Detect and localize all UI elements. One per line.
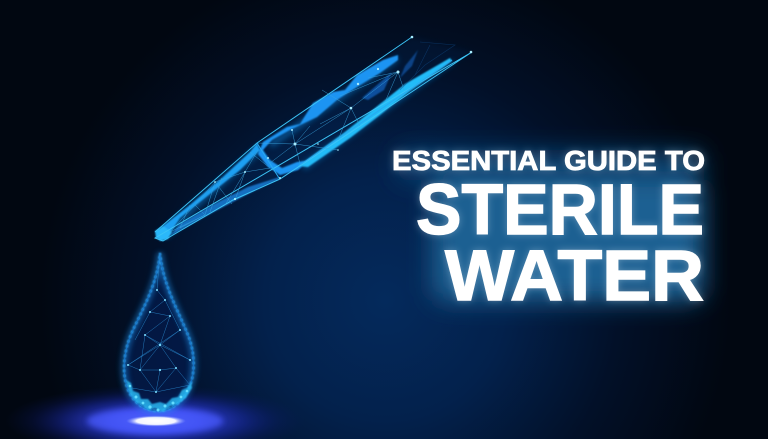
drop fill [124, 253, 194, 411]
drop beaded outline [124, 253, 194, 411]
pipette glow [155, 37, 472, 241]
title glow [392, 145, 705, 316]
title glow: STERILE [416, 171, 704, 250]
drop glow [124, 253, 194, 411]
pipette outline [155, 37, 472, 241]
title line 1: ESSENTIAL GUIDE TO [392, 145, 705, 176]
title glow: ESSENTIAL GUIDE TO [392, 145, 705, 176]
title line 3: WATER [445, 237, 704, 316]
title glow: WATER [445, 237, 704, 316]
title line 2: STERILE [416, 171, 704, 250]
title [392, 145, 705, 316]
glow pool under the drop [5, 385, 305, 439]
pipette nodes [214, 36, 472, 200]
drop base highlight [126, 380, 192, 412]
drop nodes [127, 289, 191, 393]
icon: glowing water drop [124, 253, 194, 412]
drop mesh [128, 253, 190, 392]
pipette mesh [170, 72, 404, 232]
glow behind title [398, 150, 704, 302]
icon: glowing dropper pipette [155, 36, 472, 241]
pipette bright bands [155, 50, 452, 241]
